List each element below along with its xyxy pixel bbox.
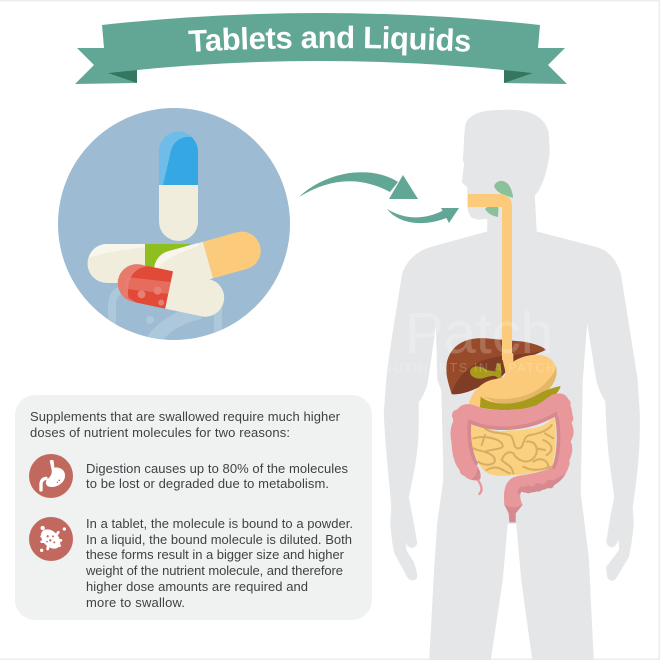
icon: stomach (29, 454, 73, 498)
digestive organs (469, 353, 561, 410)
text panel (15, 395, 372, 620)
pancreas (480, 386, 561, 410)
reason 1 text: to be lost or degraded due to metabolism. (86, 476, 329, 491)
mouth and esophagus tube (468, 194, 512, 360)
title text: Tablets and Liquids (188, 26, 470, 56)
watermark text: Patch (405, 301, 553, 366)
capsule: blue (159, 132, 198, 241)
reason 2 text: these forms result in a bigger size and higher (86, 547, 345, 562)
title banner (75, 13, 567, 84)
left ribbon tail (75, 48, 137, 84)
icon: molecule (29, 517, 73, 561)
left ribbon fold (108, 70, 137, 83)
reason 2 text: higher dose amounts are required and (86, 579, 308, 594)
reason 1 text: Digestion causes up to 80% of the molecules (86, 461, 348, 476)
capsules circle (58, 108, 290, 345)
small intestine (470, 416, 556, 476)
ribbon main band (102, 13, 540, 73)
reason 2 text: In a tablet, the molecule is bound to a powder. (86, 516, 353, 531)
right ribbon tail (504, 48, 567, 84)
intro text: doses of nutrient molecules for two reasons: (30, 425, 290, 440)
intestines (451, 393, 574, 522)
leaf: upper throat (494, 181, 513, 198)
large intestine (451, 393, 574, 522)
arrow: large (299, 172, 418, 199)
stomach (469, 353, 557, 409)
reason 2 text (85, 516, 353, 610)
body silhouette (384, 110, 639, 660)
intro text (30, 409, 341, 440)
gallbladder (470, 363, 502, 380)
watermark in circle (112, 288, 218, 345)
arrow: small (387, 208, 459, 223)
capsule: orange (150, 227, 265, 293)
liver (446, 338, 546, 394)
leaf: lower throat (485, 205, 498, 217)
appendix (477, 479, 482, 494)
reason 1 text (86, 461, 348, 491)
circle background (58, 108, 290, 340)
reason 2 text: In a liquid, the bound molecule is diluted. Both (86, 532, 352, 547)
right ribbon fold (504, 70, 533, 83)
capsule: red (114, 261, 228, 320)
reason 2 text: weight of the nutrient molecule, and therefore (85, 563, 343, 578)
intro text: Supplements that are swallowed require much higher (30, 409, 341, 424)
capsule: green (88, 244, 190, 283)
reason 2 text: more to swallow. (86, 595, 185, 610)
panel background (15, 395, 372, 620)
watermark text: NUTRIENTS IN A PATCH (383, 361, 555, 375)
